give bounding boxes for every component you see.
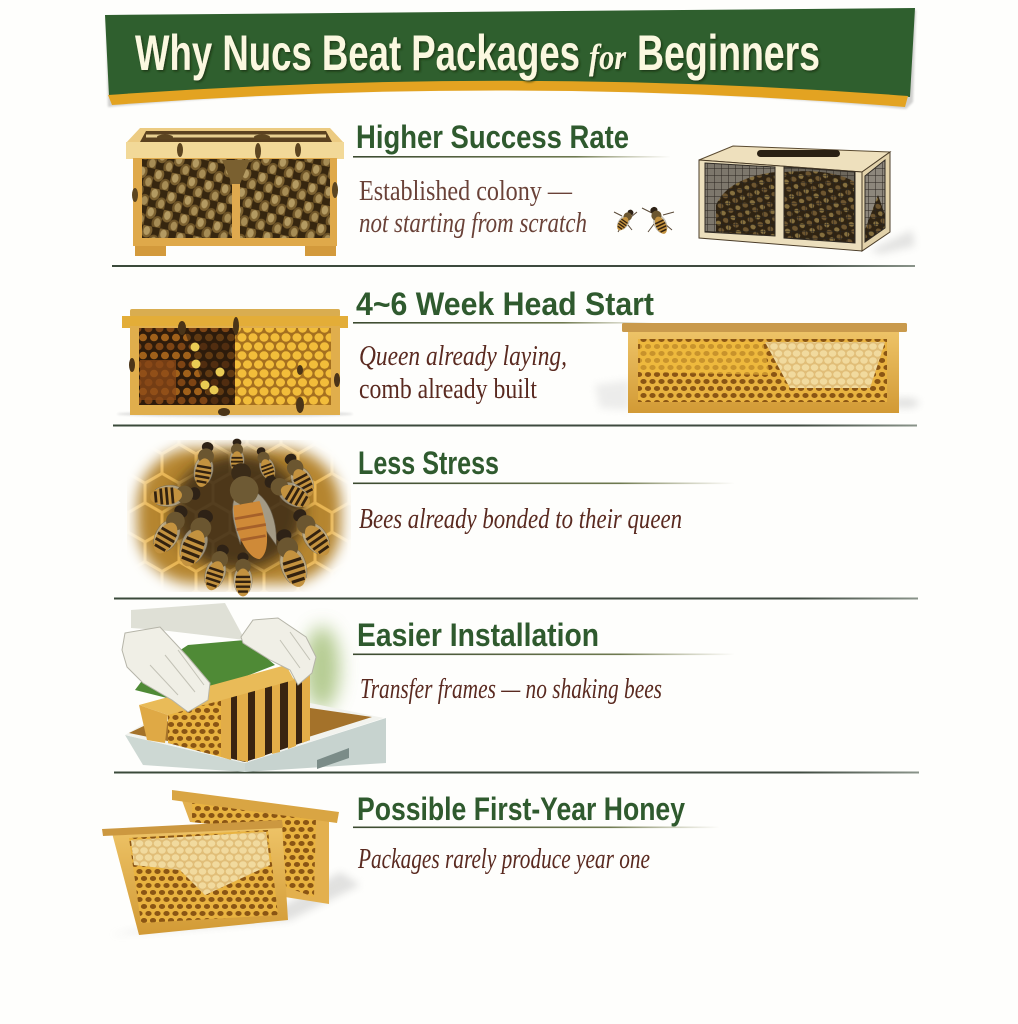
heading: Higher Success Rate <box>356 119 629 155</box>
description: Bees already bonded to their queen <box>359 504 682 535</box>
heading underline <box>353 826 720 828</box>
image: gloved hands lifting frame into hive <box>122 603 386 772</box>
title banner <box>105 8 916 109</box>
image: brood frame <box>117 309 353 417</box>
section divider lines <box>112 265 919 774</box>
heading underline <box>353 322 653 324</box>
heading underline <box>353 654 735 655</box>
heading underline <box>353 156 671 158</box>
heading underline <box>353 482 735 484</box>
left glove <box>122 627 210 712</box>
heading: Possible First-Year Honey <box>357 791 685 827</box>
description: not starting from scratch <box>359 208 587 239</box>
panel: head start <box>117 286 919 417</box>
image: nuc box full of bees <box>126 128 344 256</box>
description: Queen already laying, <box>359 341 567 372</box>
title word: Beginners: Beginners <box>637 25 820 81</box>
panel: first-year honey <box>102 790 720 935</box>
heading: Less Stress <box>358 445 499 481</box>
infographic <box>102 8 920 935</box>
panel: higher success rate <box>126 119 915 256</box>
description: comb already built <box>359 374 537 405</box>
heading: Easier Installation <box>357 617 599 653</box>
heading: 4~6 Week Head Start <box>356 286 654 322</box>
panel: less stress <box>127 439 735 596</box>
panel: easier installation <box>122 603 735 772</box>
description: Transfer frames — no shaking bees <box>360 674 662 705</box>
title word: for: for <box>589 37 627 77</box>
image: built comb frame <box>595 323 919 413</box>
image: package cage <box>699 146 915 254</box>
frame <box>168 675 310 762</box>
right glove <box>241 618 316 685</box>
description: Established colony — <box>359 176 573 207</box>
description: Packages rarely produce year one <box>357 844 650 875</box>
image: two honey frames <box>102 790 360 935</box>
hive box <box>125 735 245 772</box>
image: bees on comb <box>127 439 351 596</box>
description <box>359 176 587 239</box>
description <box>359 341 567 405</box>
icon: two bees <box>614 205 674 236</box>
title text: Why Nucs Beat Packages <box>135 25 580 81</box>
